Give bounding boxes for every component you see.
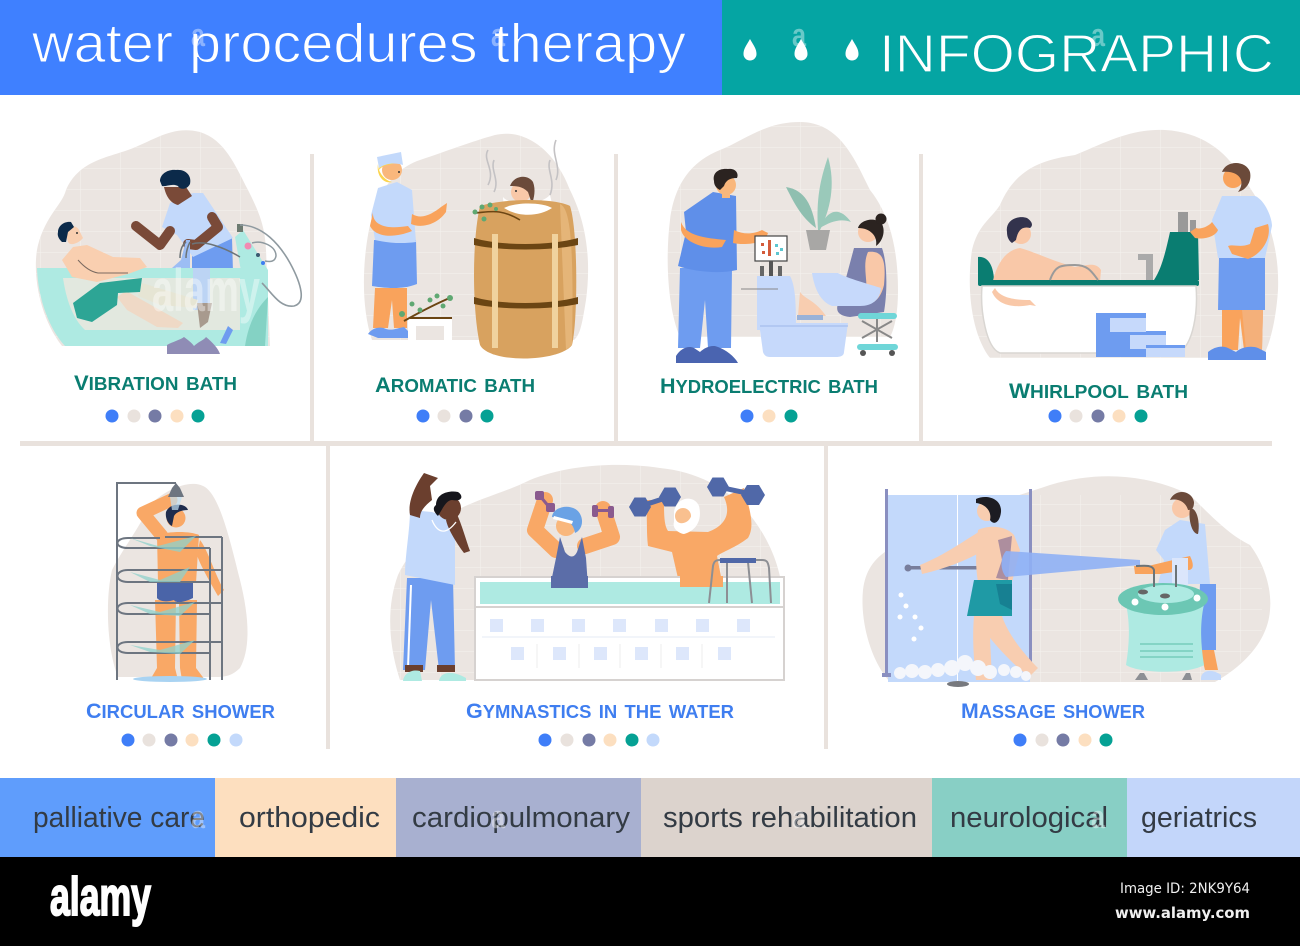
- blob background: [36, 130, 270, 346]
- blob background: [970, 130, 1278, 358]
- label: circular shower: Circular shower: [86, 696, 275, 724]
- nurse: [136, 170, 233, 272]
- hydro machine: [741, 276, 848, 357]
- walker: [709, 560, 771, 603]
- grab bar: [904, 564, 979, 572]
- icon: big dumbbells: [629, 478, 765, 516]
- alamy logo: alamy: [50, 867, 151, 927]
- panel: circular shower: [86, 483, 275, 746]
- infographic heading: INFOGRAPHIC: [879, 24, 1274, 84]
- label: whirlpool bath: Whirlpool bath: [1009, 376, 1188, 404]
- legend: orthopedic: [215, 778, 396, 857]
- footer: stock photo strip: [0, 857, 1300, 946]
- legend: palliative care: palliative care: [33, 802, 205, 834]
- label: massage shower: Massage shower: [961, 696, 1145, 724]
- blob background: [862, 476, 1270, 682]
- shower head: [168, 483, 184, 510]
- shower hose and control panel: [180, 224, 301, 306]
- monitor: [755, 236, 787, 277]
- panel: hydroelectric bath: [660, 122, 898, 422]
- twig on barrel: [472, 202, 520, 222]
- dots: [106, 410, 204, 422]
- watermark letters: a: [792, 17, 806, 53]
- water jet: [1002, 551, 1140, 577]
- legend: geriatrics: geriatrics: [1141, 802, 1257, 834]
- shower panel: [882, 489, 1032, 682]
- plant: [786, 157, 851, 250]
- label: aromatic bath: Aromatic bath: [375, 370, 535, 398]
- steam: [486, 140, 558, 195]
- watermark letters: a: [191, 799, 205, 835]
- panel: vibration bath: [36, 130, 301, 422]
- panel: aromatic bath: [364, 134, 588, 423]
- patient man: [992, 217, 1101, 285]
- doctor: [676, 169, 768, 363]
- foam: [894, 655, 1031, 681]
- shower head water: [172, 240, 190, 268]
- legend: cardiopulmonary: cardiopulmonary: [412, 802, 631, 834]
- dots: [1048, 410, 1148, 422]
- water jets: [130, 536, 196, 654]
- panel: whirlpool bath: [970, 130, 1278, 423]
- legend: sports rehabilitation: [641, 778, 932, 857]
- trainer: [403, 473, 470, 681]
- water puddle: [133, 676, 207, 682]
- blob background: [390, 465, 783, 680]
- dots: [416, 410, 494, 422]
- exerciser woman: [535, 500, 612, 589]
- potted plant: [399, 294, 453, 340]
- steps: [1096, 313, 1185, 357]
- icon: small dumbbells: [535, 491, 614, 518]
- watermark letters: a: [1091, 799, 1105, 835]
- header: [0, 0, 1300, 95]
- watermark letters: [191, 17, 1105, 835]
- title: water procedures therapy: [31, 12, 687, 74]
- blob background: [668, 122, 898, 337]
- header left band: [0, 0, 722, 95]
- man: [920, 497, 1038, 680]
- legend: geriatrics: [1127, 778, 1300, 857]
- blob background: [364, 134, 588, 340]
- headrest: [978, 257, 994, 282]
- watermark letters: a: [792, 799, 806, 835]
- image id: Image ID: 2NK9Y64: [1120, 881, 1250, 897]
- watermark letters: a: [191, 17, 205, 53]
- patient woman: [812, 214, 886, 317]
- dividers: [20, 154, 1272, 749]
- legend: neurological: [932, 778, 1127, 857]
- blob background: [108, 484, 248, 677]
- legend: sports rehabilitation: sports rehabilitation: [663, 802, 917, 834]
- dots: [538, 734, 660, 746]
- slippers: [167, 337, 220, 354]
- watermark: alamy: [152, 257, 260, 324]
- drain: [947, 681, 969, 687]
- nurse: [1190, 163, 1272, 360]
- walker seat: [720, 558, 756, 563]
- bath tub: [37, 268, 268, 346]
- nurse: [1134, 492, 1221, 680]
- stool: [857, 313, 898, 356]
- exerciser bodies above water edge: [680, 576, 723, 587]
- panel: massage shower: [862, 476, 1270, 746]
- tank top above water edge: [551, 576, 588, 588]
- panel: gymnastics in the water: [390, 465, 784, 746]
- label: hydroelectric bath: Hydroelectric bath: [660, 371, 878, 399]
- legend: neurological: neurological: [950, 802, 1108, 834]
- rails: [117, 483, 222, 680]
- legend: cardiopulmonary: [396, 778, 641, 857]
- label: vibration bath: Vibration bath: [74, 368, 237, 396]
- watermark letters: a: [491, 17, 505, 53]
- legend: orthopedic: orthopedic: [239, 802, 380, 834]
- header right band: [722, 0, 1300, 95]
- dots: [740, 410, 798, 422]
- legend bar: [0, 778, 1300, 857]
- exerciser old man: [645, 488, 751, 587]
- nurse: [368, 152, 447, 338]
- water drops: [898, 592, 924, 642]
- watermark letters: a: [491, 799, 505, 835]
- website: www.alamy.com: [1115, 904, 1250, 922]
- dots: [1014, 734, 1112, 746]
- barrel: [474, 200, 578, 359]
- patient: [58, 222, 198, 328]
- watermark letters: a: [1091, 17, 1105, 53]
- label: gymnastics in the water: Gymnastics in the water: [466, 696, 734, 724]
- pool: [475, 577, 784, 680]
- massage console: [1118, 565, 1208, 680]
- dots: [122, 734, 242, 746]
- icon: water drops: [744, 39, 858, 60]
- man: [143, 500, 224, 680]
- bath tub: [978, 212, 1199, 353]
- woman in barrel: [503, 177, 554, 212]
- legend: palliative care: [0, 778, 215, 857]
